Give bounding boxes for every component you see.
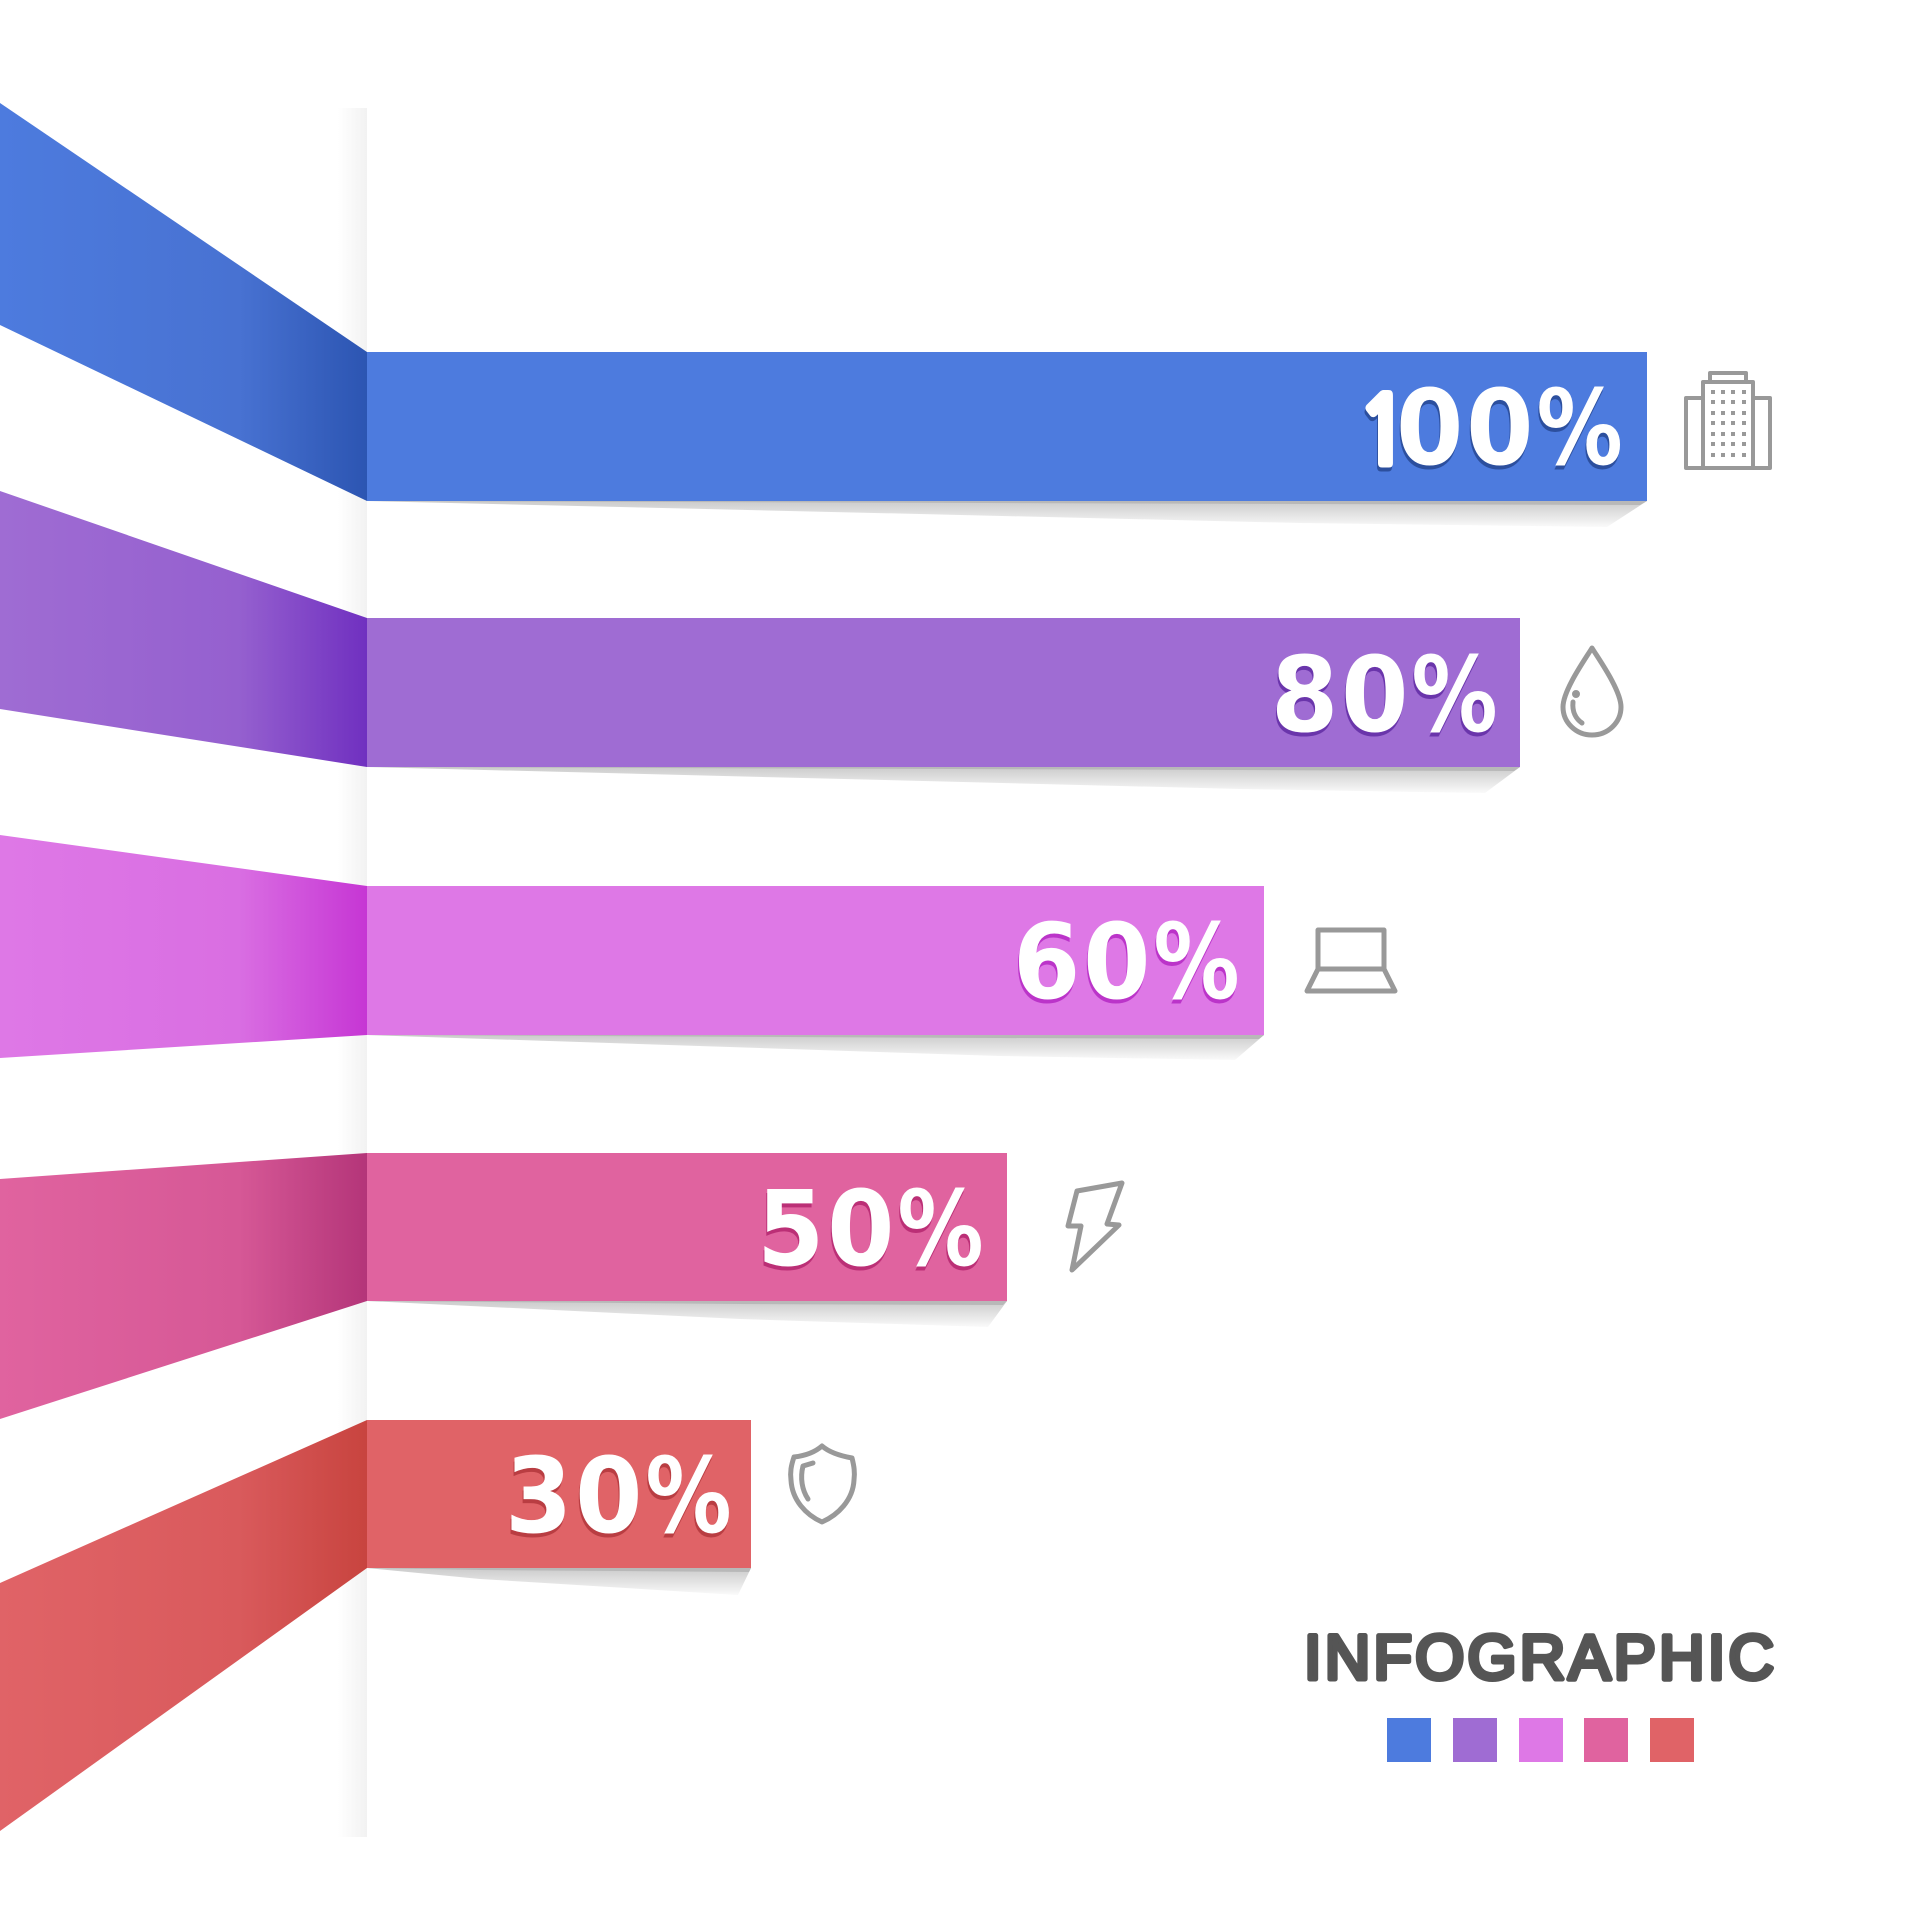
legend swatches [1387,1718,1694,1762]
value label: 50% [757,1168,986,1290]
icon: laptop [1307,930,1395,991]
bar shadow: 30% [367,1568,751,1595]
icon: water drop [1563,648,1621,735]
value label: 60%: % [1153,901,1242,1023]
vertical fold shadow [338,108,367,1837]
bar shadow: 60% [367,1035,1264,1060]
value label: 30%: 30 [505,1435,645,1557]
bar: 80% [367,618,1520,767]
icon: building [1686,373,1770,468]
ribbon: pink [0,1153,367,1419]
value label: 80% [1271,634,1500,756]
bar shadow: 80% [367,767,1520,793]
value label: 50%: 50 [757,1168,897,1290]
value label: 50%: % [897,1168,986,1290]
bar: 30% [367,1420,751,1568]
ribbon: orchid [0,835,367,1058]
value label: 100%: % [1536,367,1625,489]
ribbon: blue [0,103,367,501]
icon: shield [791,1446,854,1522]
value label: 80%: 80 [1271,634,1411,756]
bar: 60% [367,886,1264,1035]
value label: 60% [1013,901,1242,1023]
bar: 100% [367,352,1647,501]
value label: 80%: % [1411,634,1500,756]
ribbon: purple [0,491,367,767]
value label: 30% [505,1435,734,1557]
bar shadow: 100% [367,501,1647,527]
value label: 60%: 60 [1013,901,1153,1023]
value label: 30%: % [645,1435,734,1557]
bar shadow: 50% [367,1301,1007,1327]
title: INFOGRAPHIC [1304,1623,1774,1693]
value label: 100%: 100 [1357,367,1536,489]
ribbon: red [0,1420,367,1831]
bar: 50% [367,1153,1007,1301]
value label: 100% [1357,367,1625,489]
icon: lightning bolt [1068,1183,1122,1270]
